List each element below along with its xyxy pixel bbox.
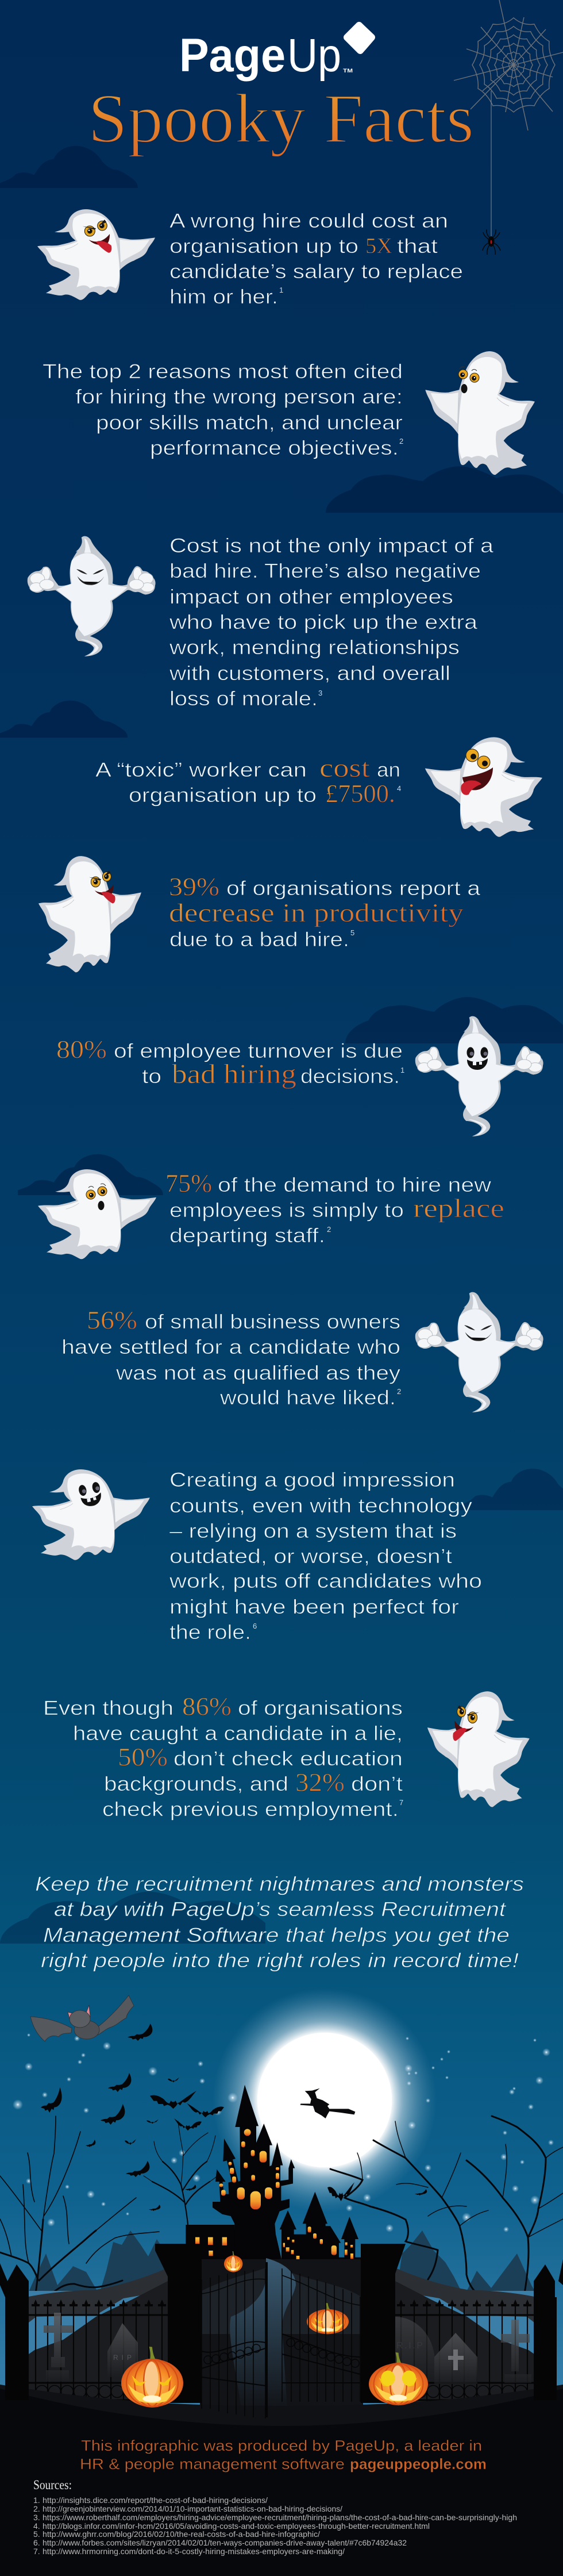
fact 9: text: counts, even with technology [169, 1495, 473, 1517]
fact 3: text: bad hire. There’s also negative [169, 560, 481, 582]
ghost face: crazy [461, 749, 493, 795]
fact 6: text: to [142, 1065, 161, 1088]
fact 1: ghost [37, 209, 155, 300]
fact 8: text: was not as qualified as they [115, 1362, 401, 1384]
fact 10: ghost [427, 1691, 530, 1807]
fact 9: text: might have been perfect for [169, 1596, 459, 1618]
castle lower buildings [186, 2192, 361, 2271]
fact 2: text: poor skills match, and unclear [96, 412, 403, 434]
tombstone: left RIP: R I P [113, 2354, 132, 2362]
fact 10: text: don’t [351, 1773, 403, 1795]
fact 6: text: decisions. [300, 1065, 400, 1088]
fact 9: text: Creating a good impression [169, 1469, 455, 1491]
fact 5: text: 39% [169, 873, 219, 901]
fact 6: text: 1 [400, 1066, 404, 1074]
fact 1: text: A wrong hire could cost an [169, 210, 448, 232]
fact 4: text [95, 753, 401, 808]
fact 1: text [169, 210, 463, 308]
fact 9: text: 6 [253, 1622, 257, 1630]
fact 4: text: organisation up to [129, 784, 317, 807]
tombstone: left RIP [107, 2323, 138, 2377]
fact 8: text [61, 1306, 401, 1409]
bare trees [0, 2116, 563, 2297]
fact 6: ghost [415, 1016, 543, 1137]
fact 3: text: Cost is not the only impact of a [169, 535, 494, 557]
fact 2: text: performance objectives. [150, 437, 399, 459]
castle silhouette [213, 2085, 295, 2259]
fact 9: text: work, puts off candidates who [169, 1570, 482, 1592]
castle and witch [186, 2085, 361, 2271]
logo: PageUp: TM [343, 68, 353, 74]
gateway ground and road [200, 2258, 363, 2409]
graveyard: right fence and hill [395, 2268, 534, 2403]
fact 7: text: departing staff. [169, 1224, 325, 1247]
bats [41, 2024, 427, 2211]
fact 5: ghost [38, 856, 141, 972]
fact 4: ghost [425, 737, 542, 837]
sources list: http://blogs.infor.com/infor-hcm/2016/05/avoiding-costs-and-toxic-employees-through-better-recruitment.html [43, 2521, 430, 2531]
fact 10: text: of organisations [238, 1697, 403, 1719]
fact 3: text: 3 [318, 689, 322, 697]
sources list: 1. [33, 2496, 40, 2505]
fact 7: text [165, 1169, 504, 1247]
footer credit: pageuppeople.com [350, 2455, 487, 2473]
logo: PageUp [179, 25, 372, 82]
fact 3: text [169, 535, 494, 710]
fact 8: text: would have liked. [219, 1387, 396, 1409]
cloud: third, left [0, 701, 128, 738]
closing statement: Management Software that helps you get the [43, 1924, 510, 1947]
fact 5: text: decrease in productivity [169, 898, 464, 927]
sources list: 4. [33, 2521, 40, 2531]
fact 5: text: of organisations report a [226, 877, 481, 900]
fact 3: text: loss of morale. [169, 688, 318, 710]
fact 2: text: 2 [399, 437, 403, 446]
fact 8: text: 2 [397, 1387, 401, 1396]
fact 3: text: impact on other employees [169, 586, 453, 608]
logo: PageUp: Page [179, 29, 286, 82]
cloud: behind ghost six [345, 997, 563, 1043]
cloud: behind ghost seven [18, 1154, 163, 1195]
fact 7: text: of the demand to hire new [218, 1174, 492, 1196]
fact 2: text: for hiring the wrong person are: [75, 386, 403, 408]
closing statement: right people into the right roles in record time! [41, 1949, 519, 1972]
sources list: 6. [33, 2538, 40, 2547]
fact 4: text: £7500. [325, 780, 395, 808]
closing statement: at bay with PageUp’s seamless Recruitment [54, 1898, 506, 1921]
sources list: 2. [33, 2504, 40, 2513]
pumpkin: right [369, 2352, 428, 2405]
icon: spider on thread [483, 91, 500, 255]
fact 4: text: cost [319, 753, 370, 782]
fact 10: text: have caught a candidate in a lie, [73, 1722, 403, 1745]
fact 1: text: 5X [365, 234, 392, 258]
fact 8: ghost [415, 1292, 543, 1412]
pumpkin: on gate [307, 2303, 349, 2334]
fact 1: text: candidate’s salary to replace [169, 260, 463, 283]
fact 7: text: 2 [327, 1225, 331, 1234]
fact 5: text [169, 873, 481, 951]
sources list: http://insights.dice.com/report/the-cost-of-bad-hiring-decisions/ [43, 2496, 268, 2505]
fact 1: text: organisation up to [169, 235, 358, 258]
fact 7: ghost [38, 1169, 156, 1259]
logo: PageUp: Up [287, 29, 341, 82]
tombstone: right stones [395, 2317, 531, 2384]
fact 5: text: 5 [350, 928, 354, 937]
fact 6: text: of employee turnover is due [114, 1040, 403, 1062]
fact 7: text: replace [413, 1193, 504, 1223]
fact 6: text [56, 1035, 404, 1089]
closing statement: Keep the recruitment nightmares and monsters [35, 1873, 524, 1895]
fact 8: text: have settled for a candidate who [61, 1336, 400, 1358]
fact 9: text: the role. [169, 1621, 251, 1644]
cloud: behind closing text [0, 1892, 265, 1944]
pine trees [23, 2231, 543, 2305]
fact 8: text: 56% [87, 1306, 137, 1334]
fact 7: text: 75% [165, 1169, 212, 1197]
fact 10: text: 7 [399, 1798, 403, 1807]
fact 10: text: 32% [295, 1768, 345, 1796]
fact 9: text: outdated, or worse, doesn’t [169, 1545, 452, 1568]
witch on broomstick [300, 2089, 355, 2118]
fact 10: text: Even though [43, 1697, 173, 1719]
fact 9: text: – relying on a system that is [169, 1520, 457, 1542]
tombstone: right stones: R.I.P [396, 2341, 423, 2351]
cloud: top left [0, 146, 138, 188]
pumpkin: left [121, 2347, 183, 2407]
cloud: second, right [326, 466, 563, 513]
fact 3: ghost [28, 536, 156, 657]
sources list: 5. [33, 2529, 40, 2539]
sources list: http://www.ghrr.com/blog/2016/02/10/the-real-costs-of-a-bad-hire-infographic/ [43, 2529, 320, 2539]
sources list: https://www.roberthalf.com/employers/hiring-advice/employee-recruitment/hiring-plans/the-cost-of-a-bad-hire-can-be-surprisingly-high [43, 2513, 517, 2522]
sources list [33, 2496, 517, 2556]
fact 9: text [169, 1469, 482, 1644]
tombstone: left cross [44, 2313, 73, 2382]
fact 8: text: of small business owners [145, 1311, 400, 1333]
icon: cartoon bat [30, 1995, 134, 2041]
fact 3: text: work, mending relationships [169, 636, 460, 659]
fact 6: text: 80% [56, 1035, 107, 1064]
sources heading: Sources: [33, 2478, 72, 2492]
fact 5: text: due to a bad hire. [169, 928, 349, 951]
fact 1: text: that [397, 235, 438, 258]
fact 10: text: don’t check education [173, 1748, 403, 1770]
fact 6: text: bad hiring [172, 1059, 296, 1089]
fact 2: ghost [425, 351, 535, 475]
pumpkin: by castle [224, 2251, 242, 2272]
sources list: 3. [33, 2513, 40, 2522]
sources list: http://www.forbes.com/sites/lizryan/2014/02/01/ten-ways-companies-drive-away-talent/#7c6b74924a32 [43, 2538, 407, 2547]
sources list: 7. [33, 2547, 40, 2556]
fact 4: text: an [377, 759, 400, 781]
iron gate [202, 2268, 360, 2418]
fact 10: text: check previous employment. [102, 1798, 399, 1821]
fact 9: ghost [32, 1469, 150, 1560]
footer credit [80, 2437, 487, 2473]
cloud: behind text nine [460, 1469, 563, 1510]
stars [13, 2033, 554, 2232]
title: Spooky Facts [88, 80, 474, 158]
fact 1: text: 1 [279, 286, 283, 294]
footer credit: HR & people management software [80, 2455, 345, 2473]
castle windows [195, 2129, 353, 2261]
fact 10: text: backgrounds, and [104, 1773, 288, 1795]
fact 2: text [43, 360, 403, 459]
closing statement [35, 1873, 524, 1972]
fact 3: text: with customers, and overall [169, 662, 450, 685]
fact 10: text: 50% [118, 1743, 168, 1771]
icon: spider web [454, 0, 563, 130]
fact 3: text: who have to pick up the extra [169, 611, 478, 634]
ground shadow [0, 2385, 563, 2576]
moon with glow [213, 1988, 437, 2212]
fact 1: text: him or her. [169, 286, 278, 308]
fact 10: text: 86% [182, 1692, 232, 1721]
sources list: http://greenjobinterview.com/2014/01/10-important-statistics-on-bad-hiring-decisions/ [43, 2504, 342, 2513]
fact 10: text [43, 1692, 403, 1821]
footer credit: This infographic was produced by PageUp, a leader in [81, 2437, 482, 2454]
fact 4: text: A “toxic” worker can [95, 759, 307, 781]
fact 7: text: employees is simply to [169, 1199, 404, 1222]
fact 2: text: The top 2 reasons most often cited [43, 360, 403, 383]
gate posts [0, 2244, 563, 2417]
graveyard: left fence and hill [29, 2268, 168, 2403]
fact 4: text: 4 [397, 784, 401, 793]
sources list: http://www.hrmorning.com/dont-do-it-5-costly-hiring-mistakes-employers-are-making/ [43, 2547, 345, 2556]
